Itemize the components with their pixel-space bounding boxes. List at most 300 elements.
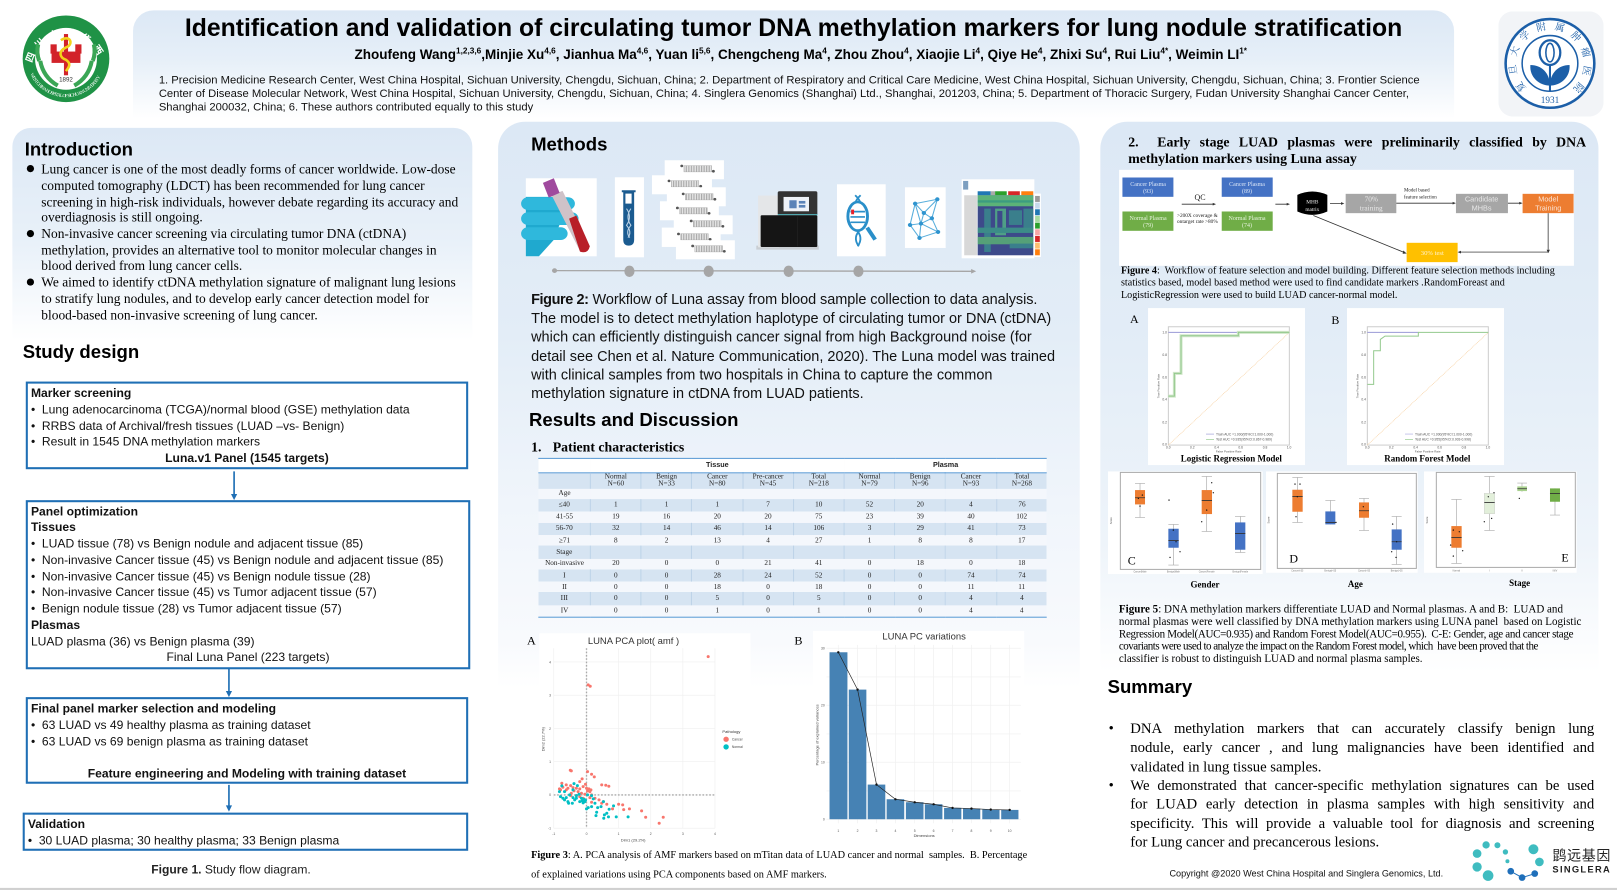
table: patient characteristics: 8 [918,536,922,544]
table: patient characteristics: N=96 [912,480,928,488]
chart: box plot by stage [1424,471,1577,588]
icon: network [905,187,946,248]
table: patient characteristics: 0 [918,582,922,591]
chart: PCA scatter plot: Dim2 (22.7%) [540,726,545,751]
table: patient characteristics: 14 [764,524,772,533]
table: patient characteristics: Normal [605,473,627,481]
table: patient characteristics: 41 [967,524,975,533]
flow box: panel optimization: Final Luna Panel (223 targets) [166,651,330,664]
table: patient characteristics: Benign [910,473,931,481]
table: patient characteristics: N=45 [760,480,776,488]
table: patient characteristics [538,458,1047,618]
chart: random forest ROC: True Positive Rate [1355,373,1359,398]
table: patient characteristics: 23 [866,512,873,521]
table: patient characteristics: 39 [917,512,924,521]
table: patient characteristics: N=93 [963,480,979,488]
chart: box plot by stage: Normal [1453,570,1461,573]
chart: PCA scatter plot: Normal [731,745,742,749]
chart: PC variations bar chart: Percentage of explained variances [814,704,819,766]
table: patient characteristics: 0 [868,571,871,579]
icon: stacked sequencing templates [652,160,735,259]
table: patient characteristics: 0 [766,582,770,591]
chart: PCA scatter plot: 4 [713,832,715,836]
table: patient characteristics: 0 [614,594,618,603]
chart: PC variations bar chart: Dimensions [913,833,934,838]
caption: figure 3: of explained variations using PCA components based on AMF markers. [531,869,827,880]
chart: PC variations bar chart: 1 [837,829,839,833]
table: patient characteristics: 0 [766,594,770,603]
heading: Study design: Study design [23,341,139,362]
table: patient characteristics: N=80 [709,480,726,488]
figure 4: workflow diagram: Candidate [1465,195,1498,204]
chart: random forest ROC: 0.2 [1389,446,1394,450]
bullet 1: overdiagnosis is still ongoing. [41,210,203,225]
table: patient characteristics: Age [559,489,571,497]
flow box: final panel marker selection: Final panel marker selection and modeling [31,702,276,715]
figure 4: workflow diagram: Normal Plasma [1130,216,1167,222]
logo: Singlera: 鹍远基因 [1552,845,1610,865]
chart: box plot by stage: I [1489,571,1490,573]
chart: PC variations bar chart: 10 [1007,829,1011,833]
affiliations [159,74,1420,114]
heading: Introduction: Introduction [25,139,133,160]
flow box: panel optimization: LUAD plasma (36) vs Benign plasma (39) [31,635,255,649]
chart: PCA scatter plot: LUNA PCA plot( amf ) [587,635,679,646]
caption: figure 1: Figure 1. Study flow diagram. [151,863,311,877]
chart: PC variations bar chart: 7 [951,829,953,833]
chart: random forest ROC: Random Forest Model [1384,454,1471,464]
table: patient characteristics: 11 [967,582,974,591]
heading: section 2: 2. Early stage LUAD plasmas were preliminarily classified by DNA [1128,134,1586,150]
chart: box plot by age: Age [1348,579,1363,589]
chart: PCA scatter plot: 1 [617,832,619,836]
table: patient characteristics: 28 [714,571,721,579]
flow box: marker screening: Marker screening [31,387,131,400]
table: patient characteristics: 75 [815,512,822,521]
summary bullet 2: specificity. This will provide a valuable tool for diagnosis and screening [1130,815,1594,832]
bullet 2: methylation, provides an alternative tool to monitor molecular changes in [41,242,437,258]
flow box: marker screening [26,382,468,469]
panel: introduction [12,128,472,340]
table: patient characteristics: 20 [612,559,619,568]
affiliations: Shanghai 200032, China; 6. These authors contributed equally to this study [159,101,533,114]
chart: logistic regression ROC: 0.8 [1263,446,1267,450]
table: patient characteristics: Total [811,473,826,481]
summary bullet 1: nodule, early cancer , and lung malignancies have been identified and [1130,740,1594,756]
flow box: panel optimization: • Non-invasive Cancer tissue (45) vs Benign nodule tissue (28) [31,570,371,583]
chart: logistic regression ROC: 1.0 [1162,330,1167,334]
table: patient characteristics: 0 [665,571,668,579]
chart: PCA scatter plot: -1 [552,832,555,836]
table: patient characteristics: 74 [967,571,975,579]
table: patient characteristics: 0 [868,594,871,603]
logo: West China Hospital [22,16,110,102]
chart: PCA scatter plot: Dim1 (29.2%) [620,838,646,843]
logo: Fudan University Shanghai Cancer Center: 复旦大学附属肿瘤医院 [1508,22,1592,93]
chart: box plot by gender: Cancer|Male [1133,571,1147,574]
flow box: validation: • 30 LUAD plasma; 30 healthy plasma; 33 Benign plasma [28,834,339,847]
chart: box plot by age: D [1289,552,1298,566]
bullet 2: Non-invasive cancer screening via circulating tumor DNA (ctDNA) [41,226,406,241]
copyright: Copyright @2020 West China Hospital and Singlera Genomics, Ltd. [1169,868,1443,878]
chart: box plot by stage: E [1561,551,1569,565]
chart: logistic regression ROC [1130,308,1305,465]
bullet 1: computed tomography (LDCT) has been recommended for lung cancer [41,177,425,193]
table: patient characteristics: 0 [766,606,770,614]
chart: random forest ROC: 0.8 [1361,353,1366,357]
chart: random forest ROC: 0.0 [1365,446,1370,450]
table: patient characteristics: 0 [715,559,719,568]
bullet 2: blood derived from lung cancer cells. [41,258,242,274]
caption: figure 5: Figure 5: DNA methylation markers differentiate LUAD and Normal plasmas. A and B: LUAD and [1119,603,1563,616]
affiliations: Center of Disease Molecular Network, West China Hospital, Sichuan University, Chengdu, Sichuan, China; 4. Singlera Genomics (Shanghai) Ltd., Shanghai, 201203, China; 5. Department of Thoracic Surgery, Fudan University Shanghai Cancer Center, [159,88,1409,100]
chart: random forest ROC: 1.0 [1361,330,1366,334]
figure 4: workflow diagram: >200X coverage & [1177,213,1219,219]
caption: figure 3: Figure 3: A. PCA analysis of AMF markers based on mTitan data of LUAD cancer and normal samples. B. Percentage [531,849,1027,861]
table: patient characteristics: 13 [714,536,721,544]
summary bullet 1: DNA methylation markers that can accurately classify benign lung [1130,721,1594,737]
table: patient characteristics: 0 [665,559,668,568]
chart: box plot by age: Cancer|>55 [1358,570,1371,573]
caption: figure 2: methylation signature in ctDNA from LUAD patients. [531,385,864,401]
bullet 3: blood-based non-invasive screening of lung cancer. [41,307,318,322]
chart: box plot by stage: Score [1425,516,1429,523]
chart: box plot by gender [1108,471,1263,590]
figure 4: workflow diagram: Cancer Plasma [1130,182,1166,188]
chart: PCA scatter plot: Cancer [731,738,743,742]
flow box: panel optimization: Plasmas [31,619,80,632]
icon: methylation heatmap [962,179,1041,258]
table: patient characteristics: 52 [866,500,873,509]
icon: sample tube [615,177,644,257]
flow box: marker screening: • Lung adenocarcinoma (TCGA)/normal blood (GSE) methylation data [31,403,410,416]
table: patient characteristics: 4 [969,594,973,603]
figure 4: workflow diagram: MHBs [1472,204,1492,213]
figure 4: workflow diagram: 70% [1365,195,1378,204]
chart: box plot by age: Benign|<55 [1324,570,1337,573]
chart: PCA scatter plot [527,633,750,843]
table: patient characteristics: Normal [858,473,881,481]
table: patient characteristics: I [563,571,565,579]
chart: PCA scatter plot: 0 [585,832,587,836]
flow box: final panel marker selection [26,697,468,784]
table: patient characteristics: 4 [969,500,973,509]
table: patient characteristics: 32 [612,524,619,533]
chart: random forest ROC: Test AUC =0.955(95%CI:0.903-0.998) [1415,437,1471,441]
logo: Fudan University Shanghai Cancer Center: 1931 [1541,96,1560,106]
flow box: marker screening: • RRBS data of Archival/fresh tissues (LUAD –vs- Benign) [31,419,344,433]
chart: logistic regression ROC: Logistic Regression Model [1181,454,1282,464]
chart: random forest ROC: 1.0 [1486,446,1490,450]
chart: logistic regression ROC: 0.4 [1162,398,1167,402]
table: patient characteristics: 0 [918,606,922,614]
chart: logistic regression ROC: 0.0 [1166,446,1171,450]
caption: figure 5: covariants were used to analyze the impact on the Random Forest model, which have been proved that the [1119,640,1538,653]
summary bullet 2: • [1109,778,1114,794]
chart: box plot by gender: Benign|Male [1167,572,1181,574]
chart: PC variations bar chart: 8 [970,829,972,833]
table: patient characteristics: 5 [817,594,821,603]
table: patient characteristics: 18 [815,582,822,591]
table: patient characteristics: 18 [1018,559,1025,568]
panel: poster header [133,10,1454,119]
chart: logistic regression ROC: 0.2 [1190,446,1195,450]
heading: Results and Discussion: Results and Discussion [529,409,738,430]
table: patient characteristics: 74 [1018,571,1026,579]
chart: random forest ROC: 0.4 [1361,398,1366,402]
table: patient characteristics: Total [1015,473,1029,481]
chart: box plot by gender: Benign|Female [1233,572,1249,574]
chart: PCA scatter plot: 1 [549,760,551,764]
chart: PC variations bar chart: LUNA PC variations [882,631,966,642]
summary bullet 2: We demonstrated that cancer-specific methylation signatures can be used [1130,778,1594,794]
figure 4: workflow diagram: MHB [1306,200,1319,206]
flow box: final panel marker selection: • 63 LUAD vs 49 healthy plasma as training dataset [31,719,311,732]
table: patient characteristics: 10 [815,500,822,509]
table: patient characteristics: 5 [715,594,719,603]
chart: random forest ROC: 0.0 [1361,443,1366,447]
caption: figure 4 [1121,265,1555,302]
chart: PC variations bar chart [794,631,1024,839]
table: patient characteristics: 46 [714,524,721,533]
title: Identification and validation of circulating tumor DNA methylation markers for lung nodule stratification [185,14,1402,42]
authors: Zhoufeng Wang1,2,3,6,Minjie Xu4,6, Jianhua Ma4,6, Yuan li5,6, Chengcheng Ma4, Zhou Zhou4, Xiaojie Li4, Qiye He4, Zhixi Su4, Rui Liu4*, Weimin LI1* [355,46,1247,62]
heading: Methods: Methods [531,134,607,155]
table: patient characteristics: 21 [764,559,772,568]
chart: logistic regression ROC: A [1130,312,1139,326]
table: patient characteristics: 7 [766,500,770,509]
table: patient characteristics: II [562,582,567,591]
summary bullet 1: • [1109,721,1114,737]
table: patient characteristics: 41-55 [556,512,573,521]
figure 5: ROC curves and box plots [1108,308,1576,590]
flow box: panel optimization [26,500,470,669]
chart: PCA scatter plot: 0 [549,793,551,797]
chart: logistic regression ROC: 1.0 [1287,446,1291,450]
chart: logistic regression ROC: 0.8 [1162,353,1167,357]
table: patient characteristics: IV [561,606,568,614]
table: patient characteristics: ≥71 [559,536,570,544]
table: patient characteristics: 18 [714,582,721,591]
figure 4: workflow diagram: Cancer Plasma [1229,182,1265,188]
chart: random forest ROC [1331,308,1504,465]
table: patient characteristics: Cancer [707,473,728,481]
icon: DNA magnifier [837,184,886,256]
table: patient characteristics: 29 [917,524,924,533]
table: patient characteristics: 0 [868,606,871,614]
table: patient characteristics: 0 [665,582,668,591]
table: patient characteristics: 20 [917,500,924,509]
logo: Singlera: SINGLERA [1552,864,1610,874]
table: patient characteristics: 27 [815,536,822,544]
summary bullet 2: for Lung cancer and precancerous lesions. [1130,834,1379,851]
caption: figure 5: classifier is robust to distinguish LUAD and normal plasma samples. [1119,653,1423,665]
bottom edge line [0,888,1617,890]
chart: box plot by age: Score [1266,516,1270,523]
chart: box plot by gender: Cancer|Female [1199,571,1215,574]
table: patient characteristics: 4 [1020,594,1024,603]
table: patient characteristics: Cancer [961,473,981,481]
caption: figure 5: normal plasmas were well classified by DNA methylation markers using LUNA panel based on Logistic [1119,616,1581,628]
figure 4: workflow diagram: Training [1535,204,1561,213]
panel: results and summary [1100,122,1598,887]
table: patient characteristics: N=79 [861,480,878,488]
chart: PC variations bar chart: 20 [821,704,824,708]
table: patient characteristics: 11 [1018,582,1025,591]
icon: sequencer [756,191,819,249]
figure 4: workflow diagram: (93) [1143,188,1153,195]
table: patient characteristics: 1 [817,606,821,614]
table: patient characteristics: Plasma [933,462,958,469]
table: patient characteristics: 0 [614,582,618,591]
table: patient characteristics: 0 [868,582,871,591]
figure 4: workflow diagram: (74) [1242,222,1252,229]
logo: Singlera [1472,841,1610,881]
chart: PC variations bar chart: 5 [913,829,915,833]
figure 4: workflow diagram: training [1360,204,1383,213]
table: patient characteristics: 2 [665,536,668,544]
timeline arrow [552,265,976,277]
table: patient characteristics: 1 [868,536,871,544]
table: patient characteristics: 0 [918,594,922,603]
figure 4: workflow diagram: QC [1195,193,1206,202]
chart: PCA scatter plot: A [527,633,536,647]
chart: PC variations bar chart: 9 [989,829,991,833]
chart: random forest ROC: Train AUC =1.000(95%CI:1.000-1.000) [1415,432,1472,436]
flow box: validation [23,813,468,851]
chart: PCA scatter plot: 4 [549,660,551,664]
table: patient characteristics: 20 [764,512,772,521]
chart: box plot by age: Cancer|<55 [1291,570,1304,573]
workflow icons [521,160,1041,277]
chart: random forest ROC: 0.8 [1462,446,1466,450]
flow box: panel optimization: • LUAD tissue (78) vs Benign nodule and adjacent tissue (85) [31,537,363,551]
table: patient characteristics: 40 [967,512,975,521]
flow box: final panel marker selection: • 63 LUAD vs 69 benign plasma as training dataset [31,735,308,748]
figure 4: workflow diagram: Normal Plasma [1229,216,1266,222]
table: patient characteristics: 18 [917,559,924,568]
panel: study design [22,341,470,877]
table: patient characteristics: 4 [766,536,770,544]
caption: figure 4: statistics based, model based method were used to find candidate markers .RandomForeast and [1121,278,1505,289]
figure 4: workflow diagram: Model based [1404,189,1430,194]
chart: PCA scatter plot: 2 [649,832,651,836]
arrow [231,471,238,500]
chart: PC variations bar chart: 0 [822,818,824,822]
bullet 3: We aimed to identify ctDNA methylation signature of malignant lung lesions [41,275,456,290]
chart: box plot by stage: Stage [1509,578,1530,588]
table: patient characteristics: 8 [614,536,618,544]
chart: PC variations bar chart: 30 [821,647,824,651]
logo: West China Hospital: WEST CHINA HOSPITAL OF SICHUAN UNIVERSITY [30,72,100,98]
caption: figure 4: Figure 4: Workflow of feature selection and model building. Different feature selection methods including [1121,265,1555,276]
table: patient characteristics: 17 [1018,536,1025,544]
table: patient characteristics: 1 [665,500,668,509]
table: patient characteristics: III [561,594,568,603]
table: patient characteristics: Stage [556,547,572,556]
logo: Fudan University Shanghai Cancer Center [1498,12,1604,116]
table: patient characteristics: 19 [612,512,619,521]
chart: random forest ROC: 0.6 [1361,375,1366,379]
table: patient characteristics: Pre-cancer [753,473,783,481]
arrow [226,669,232,697]
caption: figure 5 [1119,603,1582,665]
chart: logistic regression ROC: 0.0 [1162,443,1167,447]
chart: PC variations bar chart: B [794,633,802,647]
caption: figure 3 [531,849,1027,880]
table: patient characteristics: ≤40 [559,500,570,509]
summary bullet 2 [1109,778,1594,851]
table: patient characteristics: Non-invasive [545,559,584,568]
table: patient characteristics: N=218 [809,480,829,488]
bullet 2 [26,226,437,274]
summary bullet 1 [1109,721,1594,775]
chart: random forest ROC: 0.6 [1437,446,1442,450]
chart: box plot by stage: III/IV [1553,571,1558,573]
flow box: panel optimization: • Benign nodule tissue (28) vs Tumor adjacent tissue (57) [31,603,342,616]
chart: box plot by stage: II [1521,571,1523,573]
table: patient characteristics: N=33 [658,480,675,488]
table: patient characteristics: 24 [764,571,772,579]
figure 4: workflow diagram: Model [1538,195,1559,204]
arrow [226,784,232,812]
chart: random forest ROC: False Positive Rate [1415,449,1441,453]
chart: box plot by age [1266,471,1418,589]
figure 4: workflow diagram: (89) [1242,188,1252,195]
chart: PCA scatter plot: 3 [681,832,683,836]
panel: methods and results [498,122,1080,887]
figure 4: workflow diagram: feature selection [1404,196,1437,201]
summary bullet 2: for LUAD early detection in plasma samples with high sensitivity and [1130,796,1594,813]
chart: PC variations bar chart: 2 [856,829,858,833]
table: patient characteristics: 0 [665,594,668,603]
chart: PC variations bar chart: 10 [821,761,824,765]
heading: Summary: Summary [1108,676,1192,697]
table: patient characteristics: N=268 [1012,480,1032,488]
flow box: marker screening: • Result in 1545 DNA methylation markers [31,436,260,449]
table: patient characteristics: Tissue [706,462,729,469]
logo: West China Hospital: 1892 [59,76,73,83]
chart: random forest ROC: 0.2 [1361,420,1366,424]
table: patient characteristics: 1 [614,500,618,509]
flow box: marker screening: Luna.v1 Panel (1545 targets) [165,451,329,465]
chart: PC variations bar chart: 3 [875,829,877,833]
chart: box plot by gender: Score [1109,517,1113,524]
chart: box plot by age: Benign|>55 [1391,570,1403,573]
table: patient characteristics: 0 [665,606,668,614]
table: patient characteristics: 106 [813,524,824,533]
table: patient characteristics: 4 [1020,606,1023,614]
chart: logistic regression ROC: 0.6 [1238,446,1243,450]
table: patient characteristics: 20 [714,512,721,521]
bullet 3: to stratify lung nodules, and to develop early cancer detection model for [41,291,429,306]
chart: box plot by gender: C [1128,554,1136,568]
figure 4: workflow diagram: matrix [1305,207,1320,213]
chart: PCA scatter plot: Pathology [722,729,740,734]
table: patient characteristics: 1 [715,606,719,614]
chart: logistic regression ROC: 0.4 [1214,446,1219,450]
table: patient characteristics: 0 [868,559,871,568]
heading: section 2 [1128,134,1586,166]
bullet 1 [26,161,458,225]
table: patient characteristics: 8 [969,536,973,544]
table: patient characteristics: Benign [656,473,677,481]
table: patient characteristics: 102 [1016,512,1027,521]
table: patient characteristics: 16 [663,512,670,521]
chart: random forest ROC: B [1331,313,1339,327]
chart: PCA scatter plot: 2 [549,727,551,731]
table: patient characteristics: 14 [663,524,670,533]
